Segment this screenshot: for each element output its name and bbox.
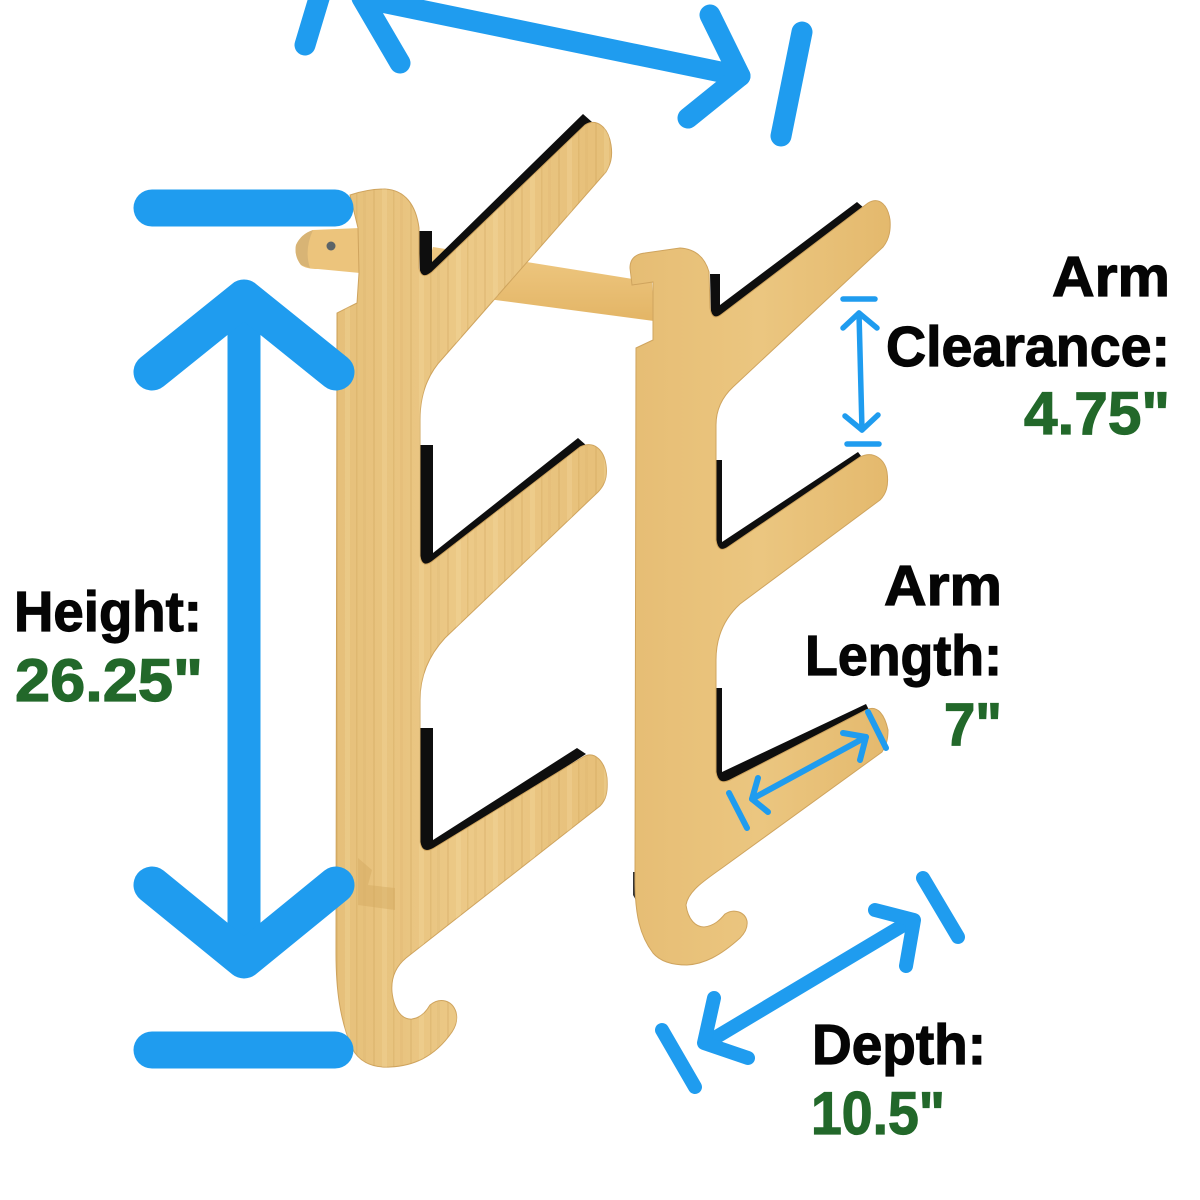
right rack <box>630 201 890 965</box>
arrow: width dimension <box>305 0 802 136</box>
label: arm clearance: Arm <box>1052 245 1170 309</box>
label: arm length <box>805 554 1002 758</box>
left rack <box>336 114 612 1067</box>
left rack grain <box>336 122 612 1067</box>
right rack black pads <box>710 202 870 788</box>
arrow: arm length <box>729 712 886 828</box>
label: depth: 10.5" <box>811 1080 945 1147</box>
left rack black pads <box>419 114 592 854</box>
label: arm length: Arm <box>884 554 1002 618</box>
right rack bamboo body <box>630 201 890 965</box>
label: height: 26.25" <box>15 647 203 714</box>
label: height: Height: <box>14 580 202 644</box>
label: arm length: 7" <box>944 691 1002 758</box>
arrow: depth dimension <box>662 878 958 1087</box>
label: arm clearance: 4.75" <box>1024 380 1170 447</box>
label: height <box>14 580 203 714</box>
arrow: height dimension <box>152 208 336 1050</box>
arrow: arm clearance <box>843 299 879 444</box>
label: arm clearance <box>886 245 1170 447</box>
label: depth: Depth: <box>812 1013 986 1077</box>
label: depth <box>811 1013 986 1147</box>
crossbar and wall peg <box>296 228 654 321</box>
label: arm clearance: Clearance: <box>886 315 1170 379</box>
label: arm length: Length: <box>805 624 1002 688</box>
left rack bamboo body <box>336 122 612 1067</box>
left rack engraved logo <box>358 858 395 910</box>
